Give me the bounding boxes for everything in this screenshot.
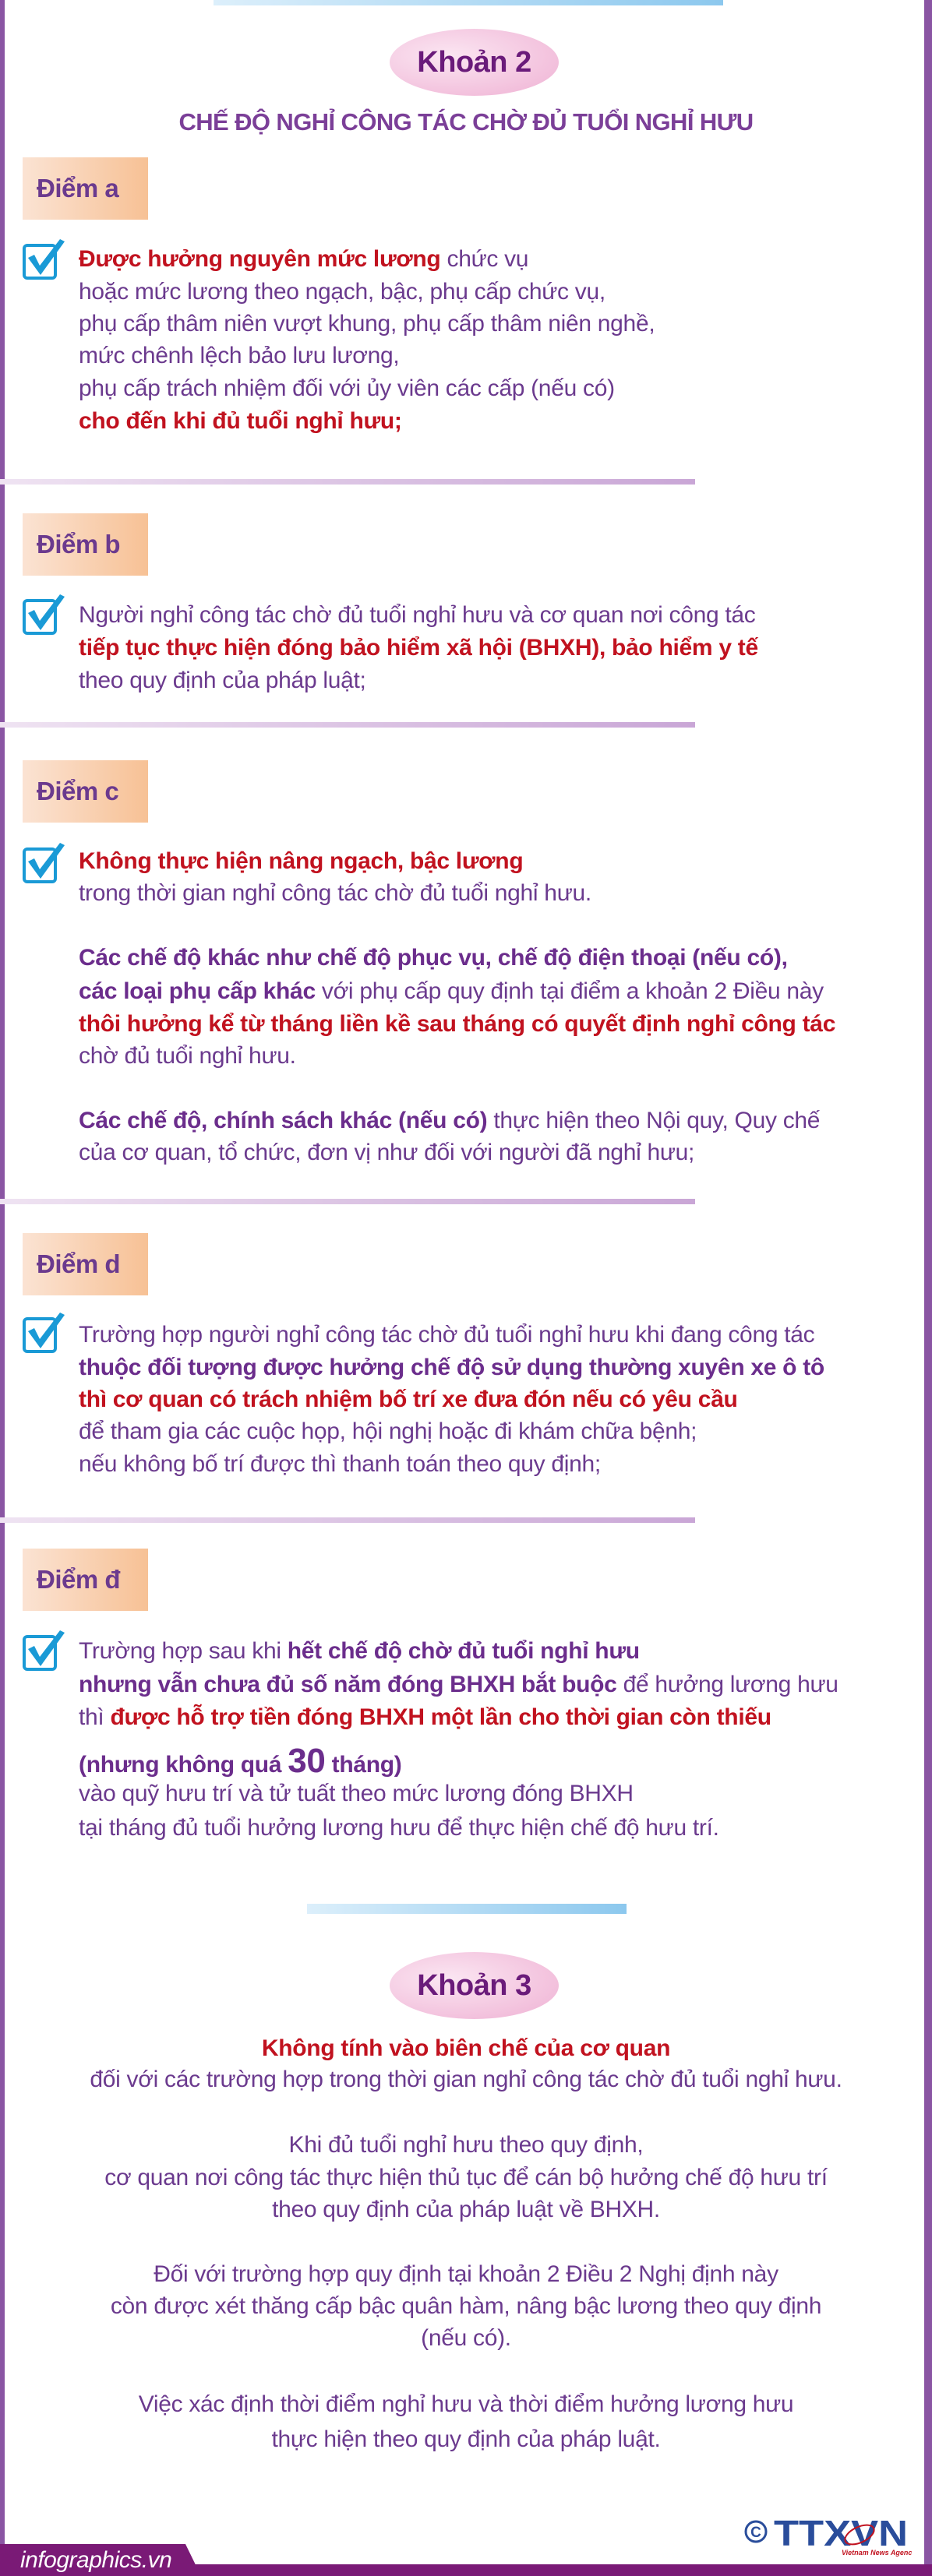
panel: Điểm c: trong thời gian nghỉ công tác chờ đủ tuổi nghỉ hưu. [79, 880, 591, 906]
logo: TTXVN: C [750, 2525, 761, 2541]
right border [924, 0, 932, 2576]
panel: Khoản 3 text: cơ quan nơi công tác thực hiện thủ tục để cán bộ hưởng chế độ hưu trí [104, 2165, 828, 2190]
icon: checkbox [23, 843, 65, 883]
icon: checkbox [23, 1630, 65, 1671]
title: CHẾ ĐỘ NGHỈ CÔNG TÁC CHỜ ĐỦ TUỔI NGHỈ HƯU [178, 108, 754, 136]
logo: TTXVN [745, 2516, 912, 2557]
heading: Khoản 2: Khoản 2 [417, 46, 531, 79]
text block [79, 1322, 824, 1477]
footer tab: infographics.vn [0, 2544, 196, 2572]
label: Điểm đ [23, 1549, 148, 1611]
panel: Điểm a: cho đến khi đủ tuổi nghỉ hưu; [79, 408, 402, 434]
panel: Điểm đ: thì được hỗ trợ tiền đóng BHXH một lần cho thời gian còn thiếu [79, 1704, 771, 1730]
panel: Khoản 3 text: Đối với trường hợp quy định tại khoản 2 Điều 2 Nghị định này [154, 2261, 778, 2287]
icon: checkbox [23, 1313, 65, 1353]
label: Điểm d [23, 1233, 148, 1295]
label: Điểm a [23, 157, 148, 220]
panel: Điểm a [23, 157, 655, 434]
panel: Điểm b: tiếp tục thực hiện đóng bảo hiểm xã hội (BHXH), bảo hiểm y tế [79, 635, 758, 661]
panel: Điểm c: thôi hưởng kể từ tháng liền kề sau tháng có quyết định nghỉ công tác [79, 1011, 835, 1037]
label: Điểm d: Điểm d [37, 1249, 120, 1278]
text block [79, 848, 835, 1165]
panel: Khoản 3 text: Việc xác định thời điểm nghỉ hưu và thời điểm hưởng lương hưu [139, 2391, 793, 2417]
label: Điểm c [23, 760, 148, 823]
panel: Khoản 3 text: theo quy định của pháp luật về BHXH. [272, 2197, 660, 2222]
label: Điểm c: Điểm c [37, 777, 118, 805]
panel: Điểm d: Trường hợp người nghỉ công tác chờ đủ tuổi nghỉ hưu khi đang công tác [79, 1322, 814, 1348]
heading: Khoản 3 [390, 1952, 559, 2019]
panel: Điểm c: Không thực hiện nâng ngạch, bậc lương [79, 848, 523, 874]
panel: Điểm d: để tham gia các cuộc họp, hội nghị hoặc đi khám chữa bệnh; [79, 1418, 697, 1444]
label: Điểm b [23, 513, 148, 576]
label: Điểm a: Điểm a [37, 174, 118, 203]
top blue bar [214, 0, 723, 5]
panel: Khoản 3 text: Không tính vào biên chế của cơ quan [262, 2035, 670, 2061]
footer band [0, 2564, 932, 2576]
panel: Điểm đ: Trường hợp sau khi hết chế độ chờ đủ tuổi nghỉ hưu [79, 1638, 640, 1664]
icon: checkbox [23, 594, 65, 635]
panel: Điểm a: phụ cấp trách nhiệm đối với ủy viên các cấp (nếu có) [79, 375, 615, 401]
label: Điểm đ: Điểm đ [37, 1565, 120, 1594]
panel: Khoản 3 text: đối với các trường hợp trong thời gian nghỉ công tác chờ đủ tuổi nghỉ hưu. [90, 2067, 842, 2092]
panel: Khoản 3 text: (nếu có). [421, 2325, 511, 2351]
panel: Khoản 3 text: thực hiện theo quy định của pháp luật. [271, 2426, 661, 2452]
panel: Khoản 3 text [90, 2035, 842, 2452]
panel: Điểm đ: (nhưng không quá 30 tháng) [79, 1742, 401, 1780]
panel: Điểm c: chờ đủ tuổi nghỉ hưu. [79, 1043, 296, 1069]
panel: Điểm d: thì cơ quan có trách nhiệm bố trí xe đưa đón nếu có yêu cầu [79, 1387, 737, 1412]
divider: blue bar [307, 1904, 627, 1914]
panel: Điểm b [23, 513, 759, 693]
text block [79, 246, 655, 434]
panel: Điểm c [23, 760, 835, 1165]
panel: Điểm b: Người nghỉ công tác chờ đủ tuổi nghỉ hưu và cơ quan nơi công tác [79, 602, 756, 628]
panel: Điểm a: mức chênh lệch bảo lưu lương, [79, 343, 399, 368]
panel: Khoản 3 text: Khi đủ tuổi nghỉ hưu theo quy định, [289, 2132, 643, 2158]
panel: Điểm d: nếu không bố trí được thì thanh toán theo quy định; [79, 1451, 601, 1477]
panel: Khoản 3 text: còn được xét thăng cấp bậc quân hàm, nâng bậc lương theo quy định [111, 2293, 821, 2319]
panel: Điểm đ: nhưng vẫn chưa đủ số năm đóng BHXH bắt buộc để hưởng lương hưu [79, 1672, 838, 1697]
panel: Điểm d [23, 1233, 824, 1477]
panel: Điểm a: hoặc mức lương theo ngạch, bậc, phụ cấp chức vụ, [79, 279, 605, 305]
panel: Điểm c: Các chế độ khác như chế độ phục vụ, chế độ điện thoại (nếu có), [79, 945, 788, 971]
heading: Khoản 3: Khoản 3 [417, 1969, 531, 2002]
panel: Điểm đ: tại tháng đủ tuổi hưởng lương hưu để thực hiện chế độ hưu trí. [79, 1815, 719, 1841]
heading: Khoản 2 [390, 29, 559, 96]
text block [79, 602, 759, 693]
label: Điểm b: Điểm b [37, 530, 120, 559]
panel: Điểm c: Các chế độ, chính sách khác (nếu có) thực hiện theo Nội quy, Quy chế [79, 1108, 820, 1133]
icon: checkbox [23, 239, 65, 280]
panel: Điểm c: của cơ quan, tổ chức, đơn vị như đối với người đã nghỉ hưu; [79, 1140, 694, 1165]
text block [79, 1638, 838, 1841]
footer tab: infographics.vn: infographics.vn [20, 2547, 171, 2573]
panel: Điểm d: thuộc đối tượng được hưởng chế độ sử dụng thường xuyên xe ô tô [79, 1355, 824, 1380]
panel: Điểm a: Được hưởng nguyên mức lương chức vụ [79, 246, 528, 272]
panel: Điểm b: theo quy định của pháp luật; [79, 668, 366, 693]
panel: Điểm đ: vào quỹ hưu trí và tử tuất theo mức lương đóng BHXH [79, 1781, 634, 1806]
panel: Điểm đ [23, 1549, 838, 1841]
panel: Điểm c: các loại phụ cấp khác với phụ cấp quy định tại điểm a khoản 2 Điều này [79, 978, 824, 1004]
left border [0, 0, 5, 2576]
panel: Điểm a: phụ cấp thâm niên vượt khung, phụ cấp thâm niên nghề, [79, 311, 655, 337]
